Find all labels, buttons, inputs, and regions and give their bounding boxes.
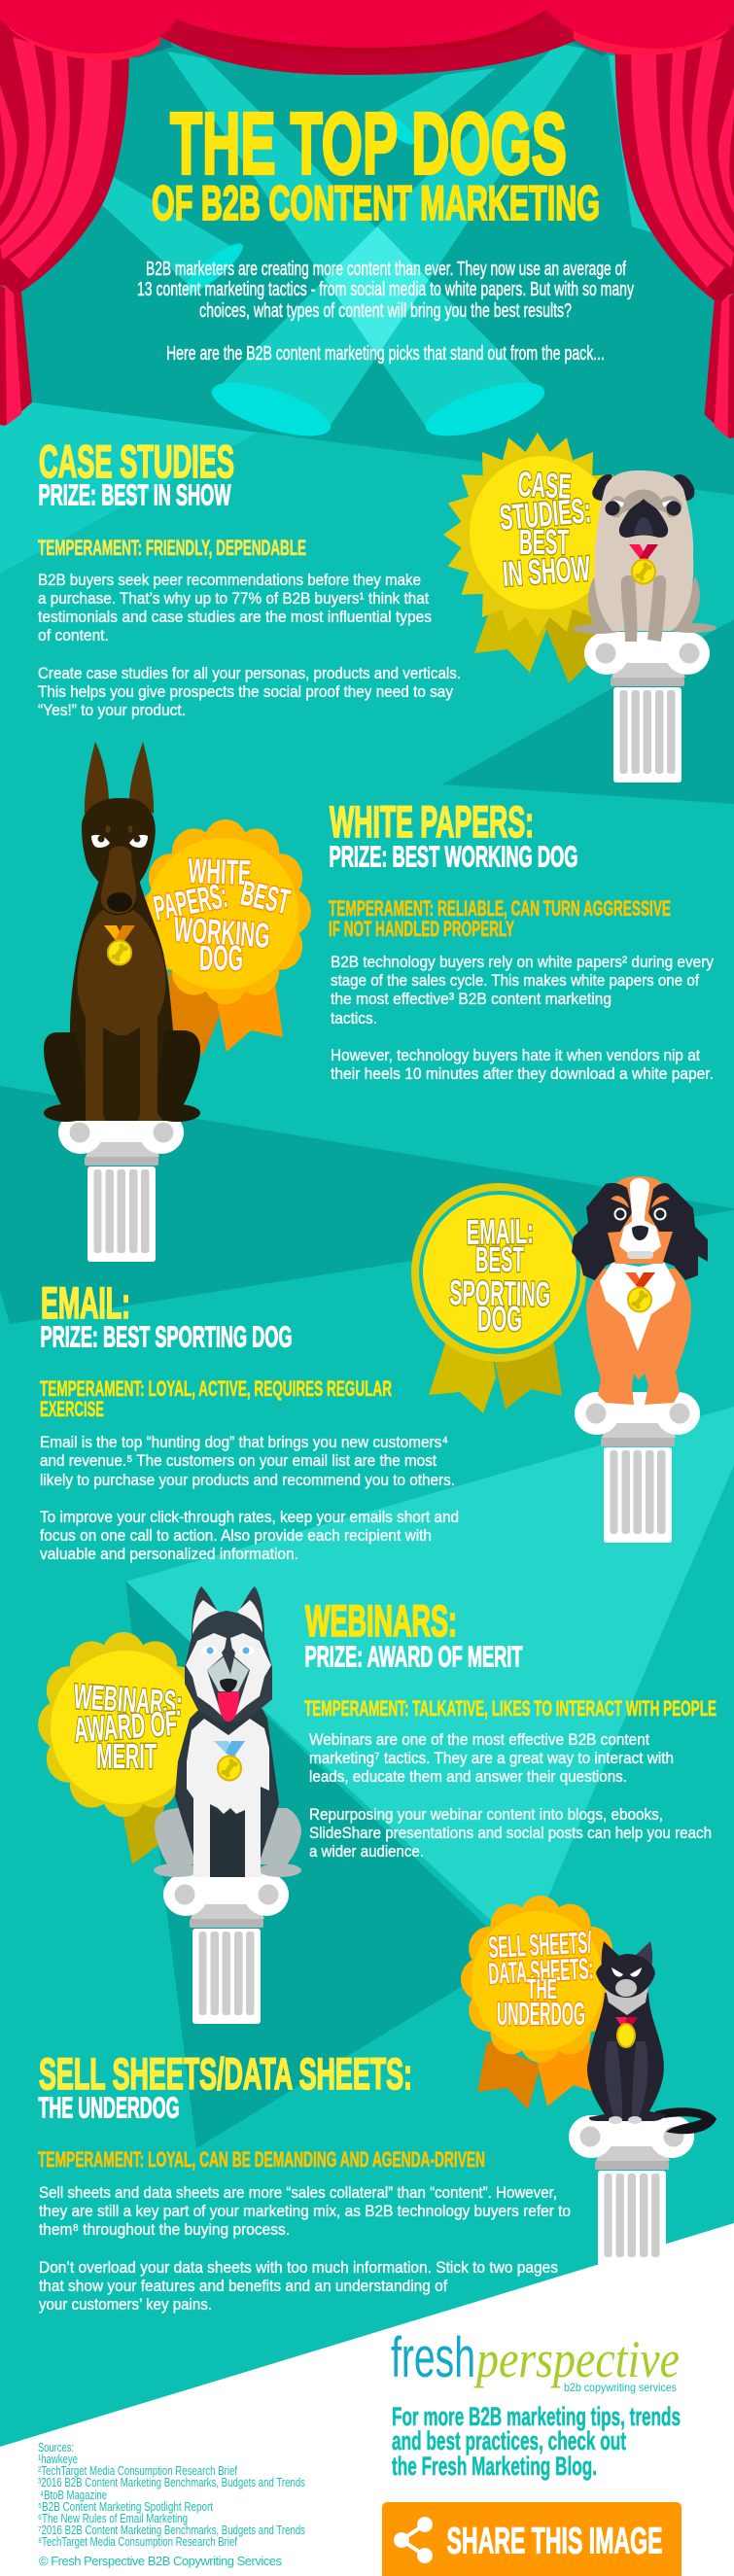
badge: best working dog: WORKING [172,909,271,956]
badge: the underdog: THE [527,1974,557,2005]
body text [40,1434,459,1563]
body text: them⁸ throughout the buying process. [39,2221,290,2239]
spotlights [101,44,653,447]
sources: ⁵B2B Content Marketing Spotlight Report [38,2500,213,2514]
body text: the most effective³ B2B content marketing [331,991,612,1008]
intro text: choices, what types of content will bring you the best results? [199,300,572,322]
body text: leads, educate them and answer their questions. [309,1768,627,1786]
badge: award of merit: MERIT [96,1736,157,1776]
badge: award of merit [38,1632,209,1864]
badge: the underdog [461,1896,620,2109]
body text: Webinars are one of the most effective B2B content [309,1731,649,1749]
body text: Repurposing your webinar content into blogs, ebooks, [309,1806,663,1824]
body text [38,572,461,719]
share button [382,2502,682,2576]
body text: Don’t overload your data sheets with too much information. Stick to two pages [39,2259,558,2277]
body text: To improve your click-through rates, keep your emails short and [40,1509,459,1526]
body text: B2B technology buyers rely on white papers² during every [331,954,715,971]
body text: likely to purchase your products and recommend you to others. [40,1472,455,1489]
valance [0,0,734,75]
body text [39,2184,571,2314]
badge: best in show: IN SHOW [502,548,591,594]
body text: testimonials and case studies are the most influential types [38,609,432,626]
panel: sell sheets [38,2049,571,2314]
temperament [40,1376,392,1421]
sources: ³2016 B2B Content Marketing Benchmarks, Budgets and Trends [38,2476,305,2489]
panel: case studies [38,435,461,719]
badge: best working dog: DOG [199,938,243,978]
badge: the underdog: UNDERDOG [497,1996,585,2032]
sources: ⁸TechTarget Media Consumption Research Brief [38,2535,237,2549]
body text: of content. [38,627,109,644]
dog: pug [573,470,717,642]
panel: white papers [329,797,715,1083]
sources: Sources: [38,2441,74,2454]
body text: they are still a key part of your marketing mix, as B2B technology buyers refer to [39,2203,571,2220]
badge: best sporting dog: BEST [475,1239,524,1279]
sources: ¹hawkeye [38,2453,78,2466]
sources: ⁶The New Rules of Email Marketing [38,2512,188,2525]
logo: fresh perspective: fresh [391,2326,475,2389]
body text: valuable and personalized information. [40,1546,298,1563]
intro text [137,259,634,365]
copyright: © Fresh Perspective B2B Copywriting Services [39,2554,282,2568]
call to action text [392,2402,681,2481]
pedestal [575,1392,700,1543]
dog: husky [154,1586,301,1877]
body text: focus on one call to action. Also provide each recipient with [40,1527,432,1545]
pedestal [163,1873,289,2024]
temperament: TEMPERAMENT: LOYAL, ACTIVE, REQUIRES REGULAR [40,1376,392,1401]
temperament: IF NOT HANDLED PROPERLY [329,917,514,941]
sources [38,2441,305,2549]
badge: award of merit: AWARD OF [73,1703,178,1750]
body text: B2B buyers seek peer recommendations before they make [38,572,421,589]
badge: best in show: CASE [517,464,573,506]
dog: doberman [44,742,200,1122]
body text: that show your features and benefits and an understanding of [39,2278,447,2295]
logo: fresh perspective: perspective [473,2330,680,2388]
temperament: TEMPERAMENT: FRIENDLY, DEPENDABLE [38,536,306,560]
icon: share [394,2517,433,2563]
panel: webinars [304,1596,717,1861]
pedestal [569,2115,694,2266]
body text: a purchase. That’s why up to 77% of B2B buyers¹ think that [38,590,429,608]
badge: best in show: BEST [519,522,569,562]
body text: Email is the top “hunting dog” that brings you new customers⁴ [40,1434,448,1451]
badge: best working dog: PAPERS: [151,875,230,928]
sources: ⁴BtoB Magazine [40,2489,107,2502]
body text [309,1731,712,1861]
panel: email [40,1278,459,1563]
sources: ⁷2016 B2B Content Marketing Benchmarks, Budgets and Trends [38,2524,305,2537]
left curtain [0,0,129,426]
prize: PRIZE: BEST IN SHOW [39,478,231,511]
badge: award of merit: WEBINARS: [72,1676,184,1723]
badge: best sporting dog: DOG [477,1299,522,1339]
body text [331,954,715,1083]
logo: fresh perspective: b2b copywriting services [564,2381,677,2394]
subheading: THE UNDERDOG [39,2090,179,2125]
badge: best in show: STUDIES: [498,490,592,538]
body text: This helps you give prospects the social proof they need to say [38,683,454,701]
logo: fresh perspective [391,2326,680,2394]
body text: a wider audience. [309,1843,424,1861]
title [152,95,600,230]
heading: WHITE PAPERS: [330,797,534,847]
body text: marketing⁷ tactics. They are a great way to interact with [309,1750,674,1767]
badge: best sporting dog [411,1183,586,1413]
prize: PRIZE: BEST SPORTING DOG [41,1320,292,1353]
badge: best sporting dog: SPORTING [449,1272,551,1314]
dog: cat [587,1941,717,2134]
body text: and revenue.⁵ The customers on your email list are the most [40,1452,437,1470]
body text: However, technology buyers hate it when vendors nip at [331,1047,700,1064]
badge: best working dog: BEST [237,873,294,922]
prize: PRIZE: AWARD OF MERIT [305,1639,523,1674]
body text: their heels 10 minutes after they download a white paper. [331,1065,714,1083]
body text: Create case studies for all your personas, products and verticals. [38,665,461,682]
call to action text: the Fresh Marketing Blog. [392,2452,597,2481]
temperament: EXERCISE [40,1397,104,1421]
dog: cavalier spaniel [572,1176,708,1405]
temperament [329,896,671,941]
pedestal [58,1111,184,1262]
badge: best in show [443,433,632,683]
badge: best working dog [140,819,311,1055]
badge: best working dog: WHITE [188,851,252,892]
body text: tactics. [331,1010,377,1027]
body text: Sell sheets and data sheets are more “sales collateral” than “content”. However, [39,2184,557,2202]
right curtain [615,0,734,438]
heading: WEBINARS: [305,1596,457,1646]
badge: best sporting dog: EMAIL: [466,1211,534,1252]
heading: CASE STUDIES [39,435,234,487]
pedestal [584,632,710,783]
body text: your customers’ key pains. [39,2296,212,2314]
sources: ²TechTarget Media Consumption Research Brief [38,2464,237,2478]
badge: the underdog: DATA SHEETS: [488,1951,594,1991]
stage curtains [0,0,734,438]
heading: EMAIL: [41,1278,130,1328]
body text: stage of the sales cycle. This makes white papers one of [331,972,699,990]
body text: “Yes!” to your product. [38,702,186,719]
badge: the underdog: SELL SHEETS/ [488,1925,592,1965]
heading: SELL SHEETS/DATA SHEETS: [39,2049,412,2099]
